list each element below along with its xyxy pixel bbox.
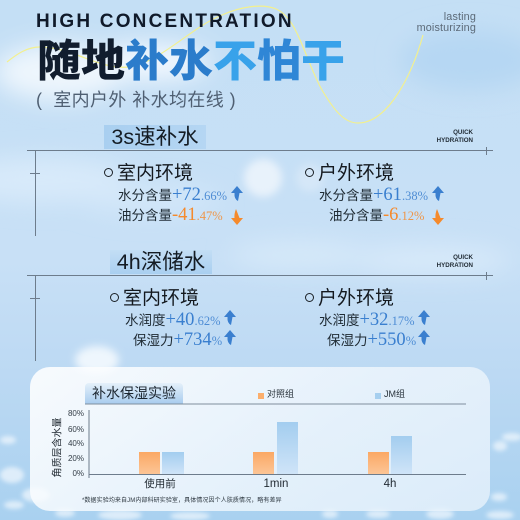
top right tagline: moisturizing [417, 22, 476, 34]
up arrow [224, 310, 236, 325]
panel: hydration experiment [30, 367, 490, 511]
legend: control group: 对照组 [267, 389, 294, 399]
top right tagline: lasting [444, 11, 476, 23]
up arrow [418, 330, 430, 345]
footnote: *数据实验均来自JM内部科研实验室，具体情况因个人肤质情况，略有差异 [82, 498, 282, 504]
section: 3s quick hydration [27, 125, 493, 236]
section frame lines [27, 272, 493, 361]
indoor heading: 室内环境 [123, 288, 199, 309]
top right tagline [417, 11, 476, 34]
english label: QUICK [453, 254, 473, 261]
outdoor heading: 户外环境 [318, 163, 394, 184]
indoor retention stat: 保湿力+734% [133, 330, 222, 350]
indoor heading: 室内环境 [117, 163, 193, 184]
outdoor water stat: 水分含量+61.38% [319, 185, 428, 205]
bars: before use [139, 452, 184, 474]
section frame lines [27, 147, 493, 236]
indoor oil stat: 油分含量-41.47% [118, 205, 223, 225]
outdoor oil stat: 油分含量-6.12% [329, 205, 424, 225]
chart heading tab [85, 383, 183, 404]
up arrow [231, 186, 243, 201]
english label: QUICK [453, 129, 473, 136]
outdoor heading: 户外环境 [318, 288, 394, 309]
bars: 4h [368, 436, 412, 474]
x axis labels: 1min [264, 478, 288, 490]
up arrow [432, 186, 444, 201]
x axis labels: 使用前 [144, 478, 176, 490]
indoor water stat: 水分含量+72.66% [118, 185, 227, 205]
top heading: HIGH CONCENTRATION [36, 11, 294, 32]
legend: JM group: JM组 [384, 389, 405, 399]
section tab: 3s速补水 [111, 125, 199, 149]
x axis labels: 4h [384, 478, 396, 490]
y axis labels [68, 409, 84, 478]
down arrow [432, 209, 444, 225]
section tab: 4h深储水 [117, 250, 205, 274]
y axis labels: 60% [68, 425, 84, 434]
english label [437, 129, 473, 144]
english label: HYDRATION [437, 262, 473, 268]
yellow wave line [6, 6, 424, 124]
x axis labels [144, 478, 396, 490]
y axis labels: 20% [68, 454, 84, 463]
up arrow [418, 310, 430, 325]
down arrow [231, 209, 243, 225]
section: 4h deep storage [27, 250, 493, 361]
english label: HYDRATION [437, 136, 473, 144]
up arrow [224, 330, 236, 345]
outdoor retention stat: 保湿力+550% [327, 330, 416, 350]
outdoor moisture stat: 水润度+32.17% [319, 310, 414, 330]
english label [437, 254, 473, 268]
y axis labels: 0% [72, 469, 84, 478]
indoor moisture stat: 水润度+40.62% [125, 310, 220, 330]
y axis title: 角质层含水量 [52, 418, 64, 478]
y axis labels: 40% [68, 439, 84, 448]
bars: 1min [253, 422, 298, 474]
main title: 随地补水不怕干 [37, 37, 345, 86]
y axis labels: 80% [68, 409, 84, 418]
chart heading tab: 补水保湿实验 [92, 385, 176, 401]
subtitle: ( 室内户外 补水均在线 ) [36, 90, 236, 110]
